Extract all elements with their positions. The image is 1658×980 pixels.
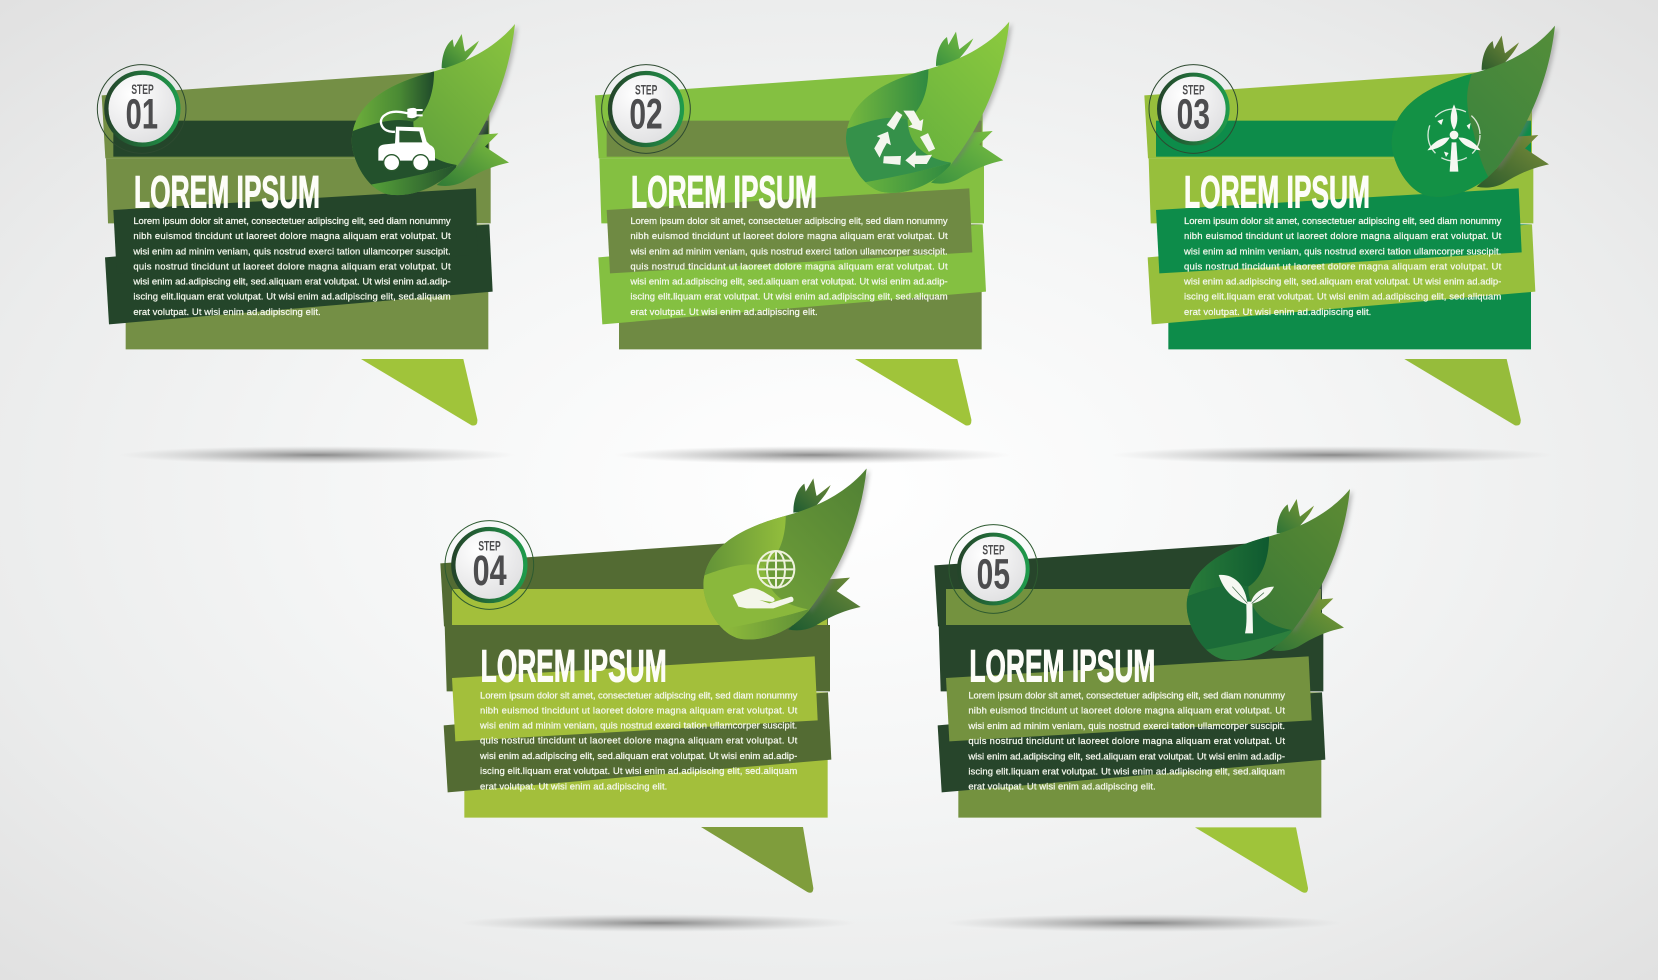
body text: wisi enim ad minim veniam, quis nostrud exerci tation ullamcorper suscipit.: [132, 246, 451, 257]
bottom block: [126, 224, 488, 349]
body text: Lorem ipsum dolor sit amet, consectetuer adipiscing elit, sed diam nonummy: [480, 690, 798, 701]
bottom block: [464, 692, 828, 818]
heading: LOREM IPSUM: [134, 166, 320, 217]
small leaves right: [1477, 135, 1549, 188]
body text: iscing elit.liquam erat volutpat. Ut wisi enim ad.adipiscing elit, sed.aliquam: [968, 766, 1285, 777]
body text: erat volutpat. Ut wisi enim ad.adipiscing elit.: [1184, 307, 1371, 318]
body text: wisi enim ad.adipiscing elit, sed.aliquam erat volutpat. Ut wisi enim ad.adip-: [629, 277, 948, 288]
step badge: 01: [126, 90, 158, 138]
small leaves top: [1482, 36, 1519, 70]
body text: erat volutpat. Ut wisi enim ad.adipiscing elit.: [968, 782, 1156, 793]
panel: step 2: [595, 18, 1014, 426]
lower slanted strip: [444, 692, 831, 792]
inner band: [946, 589, 1321, 625]
small leaves top: [1277, 499, 1314, 533]
floor shadow: step 5: [945, 914, 1341, 932]
bottom block: [958, 692, 1321, 818]
speech tail: [1195, 827, 1308, 893]
body text: Lorem ipsum dolor sit amet, consectetuer adipiscing elit, sed diam nonummy: [133, 216, 451, 227]
body text: erat volutpat. Ut wisi enim ad.adipiscing elit.: [480, 781, 667, 792]
speech tail: [701, 827, 813, 893]
leaf shadow: [1271, 491, 1353, 633]
icon: recycle: [870, 111, 940, 172]
lower slanted strip: [598, 224, 986, 324]
top banner: [934, 538, 1322, 626]
lower slanted strip: [105, 224, 493, 324]
main leaf: [703, 468, 867, 640]
leaf shadow: [788, 470, 869, 613]
body text: wisi enim ad.adipiscing elit, sed.aliquam erat volutpat. Ut wisi enim ad.adip-: [1183, 277, 1501, 288]
body text: wisi enim ad minim veniam, quis nostrud exerci tation ullamcorper suscipit.: [1183, 246, 1501, 257]
body text: Lorem ipsum dolor sit amet, consectetuer adipiscing elit, sed diam nonummy: [968, 691, 1285, 702]
speech tail: [361, 359, 477, 426]
step badge: STEP: [478, 538, 501, 554]
small leaves right: [437, 133, 509, 186]
small leaves top: [442, 34, 479, 68]
small leaves right: [931, 131, 1003, 184]
leaf with globe and hand icon: [698, 464, 872, 648]
upper slanted strip: [452, 656, 818, 741]
step badge: 03: [1177, 91, 1210, 139]
speech tail: [1404, 359, 1521, 426]
upper slanted strip: [1156, 188, 1522, 273]
icon: wind turbine: [1426, 104, 1482, 172]
heading: LOREM IPSUM: [1184, 166, 1370, 217]
body text: quis nostrud tincidunt ut laoreet dolore magna aliquam erat volutpat. Ut: [968, 736, 1285, 747]
inner band: [452, 589, 827, 625]
body text: [967, 691, 1285, 793]
small leaves top: [793, 478, 831, 513]
upper slanted strip: [946, 656, 1312, 741]
step badge: [445, 521, 534, 609]
upper slanted strip: [607, 188, 972, 273]
body text: quis nostrud tincidunt ut laoreet dolore magna aliquam erat volutpat. Ut: [630, 261, 948, 272]
heading block: [106, 158, 491, 223]
body text: iscing elit.liquam erat volutpat. Ut wisi enim ad.adipiscing elit, sed.aliquam: [480, 766, 797, 777]
panel: step 4: [440, 464, 872, 893]
floor shadow: step 3: [1112, 446, 1552, 464]
leaf with car icon: [347, 20, 520, 203]
inner band: [607, 121, 982, 157]
icon: globe and hand: [733, 551, 794, 608]
body text: nibh euismod tincidunt ut laoreet dolore magna aliquam erat volutpat. Ut: [133, 231, 451, 242]
body text: nibh euismod tincidunt ut laoreet dolore magna aliquam erat volutpat. Ut: [968, 706, 1285, 717]
lower slanted strip: [1148, 224, 1535, 324]
step badge: [949, 525, 1038, 613]
lower slanted strip: [938, 692, 1325, 792]
leaf with sprout icon: [1182, 485, 1355, 668]
leaf shadow: [930, 23, 1012, 166]
icon: electric car: [378, 108, 435, 171]
heading block: [599, 158, 984, 223]
small leaves top: [936, 32, 973, 66]
body text: erat volutpat. Ut wisi enim ad.adipiscing elit.: [630, 307, 818, 318]
body text: iscing elit.liquam erat volutpat. Ut wisi enim ad.adipiscing elit, sed.aliquam: [630, 292, 948, 303]
bottom block: [619, 224, 982, 349]
floor shadow: step 1: [119, 446, 515, 464]
speech tail: [855, 359, 971, 426]
body text: [1183, 216, 1502, 318]
panel: step 5: [934, 485, 1355, 893]
small leaves right: [1272, 598, 1344, 651]
panel: step 1: [97, 20, 520, 426]
body text: Lorem ipsum dolor sit amet, consectetuer adipiscing elit, sed diam nonummy: [1184, 216, 1502, 227]
top banner: [595, 68, 983, 158]
body text: quis nostrud tincidunt ut laoreet dolore magna aliquam erat volutpat. Ut: [1184, 261, 1502, 272]
panel: step 3: [1144, 22, 1560, 426]
body text: iscing elit.liquam erat volutpat. Ut wisi enim ad.adipiscing elit, sed.aliquam: [133, 292, 451, 303]
step badge: [1149, 65, 1238, 153]
heading block: [445, 625, 830, 691]
step badge: 02: [629, 91, 663, 139]
leaf with wind turbine icon: [1387, 22, 1560, 202]
leaf shadow: [1476, 27, 1558, 170]
body text: [629, 216, 948, 318]
top banner: [1144, 68, 1532, 158]
small leaves right: [788, 578, 861, 630]
main leaf: [352, 24, 515, 196]
top banner: [440, 536, 828, 626]
inner band: [1156, 121, 1531, 157]
body text: wisi enim ad.adipiscing elit, sed.aliquam erat volutpat. Ut wisi enim ad.adip-: [132, 277, 451, 288]
body text: Lorem ipsum dolor sit amet, consectetuer adipiscing elit, sed diam nonummy: [630, 216, 948, 227]
body text: wisi enim ad.adipiscing elit, sed.aliquam erat volutpat. Ut wisi enim ad.adip-: [479, 751, 797, 762]
body text: quis nostrud tincidunt ut laoreet dolore magna aliquam erat volutpat. Ut: [480, 736, 798, 747]
top banner: [102, 68, 489, 158]
step badge: [602, 65, 690, 153]
step badge: STEP: [635, 81, 657, 97]
body text: nibh euismod tincidunt ut laoreet dolore magna aliquam erat volutpat. Ut: [1184, 231, 1502, 242]
inner band: [113, 121, 488, 157]
step badge: [97, 65, 186, 153]
leaf shadow: [436, 26, 518, 168]
icon: sprout: [1219, 575, 1274, 633]
body text: iscing elit.liquam erat volutpat. Ut wisi enim ad.adipiscing elit, sed.aliquam: [1184, 292, 1501, 303]
upper slanted strip: [113, 188, 477, 273]
main leaf: [1392, 26, 1555, 197]
body text: wisi enim ad minim veniam, quis nostrud exerci tation ullamcorper suscipit.: [967, 721, 1285, 732]
body text: wisi enim ad minim veniam, quis nostrud exerci tation ullamcorper suscipit.: [479, 721, 797, 732]
body text: [132, 216, 451, 318]
main leaf: [846, 22, 1010, 193]
leaf with recycle icon: [841, 18, 1014, 201]
step badge: STEP: [982, 541, 1005, 557]
main leaf: [1186, 489, 1350, 660]
body text: wisi enim ad.adipiscing elit, sed.aliquam erat volutpat. Ut wisi enim ad.adip-: [967, 751, 1285, 762]
step badge: 05: [977, 551, 1010, 599]
heading block: [1149, 158, 1533, 223]
heading: LOREM IPSUM: [631, 166, 817, 217]
bottom block: [1168, 224, 1531, 349]
step badge: 04: [473, 547, 507, 595]
body text: nibh euismod tincidunt ut laoreet dolore magna aliquam erat volutpat. Ut: [480, 705, 798, 716]
heading: LOREM IPSUM: [969, 641, 1155, 692]
body text: [479, 690, 798, 792]
body text: quis nostrud tincidunt ut laoreet dolore magna aliquam erat volutpat. Ut: [133, 261, 451, 272]
heading block: [939, 625, 1323, 691]
floor shadow: step 2: [614, 446, 1010, 464]
body text: nibh euismod tincidunt ut laoreet dolore magna aliquam erat volutpat. Ut: [630, 231, 948, 242]
floor shadow: step 4: [460, 914, 856, 932]
heading: LOREM IPSUM: [481, 641, 667, 692]
step badge: STEP: [131, 81, 154, 97]
body text: erat volutpat. Ut wisi enim ad.adipiscing elit.: [133, 307, 321, 318]
step badge: STEP: [1182, 81, 1205, 97]
body text: wisi enim ad minim veniam, quis nostrud exerci tation ullamcorper suscipit.: [629, 246, 948, 257]
